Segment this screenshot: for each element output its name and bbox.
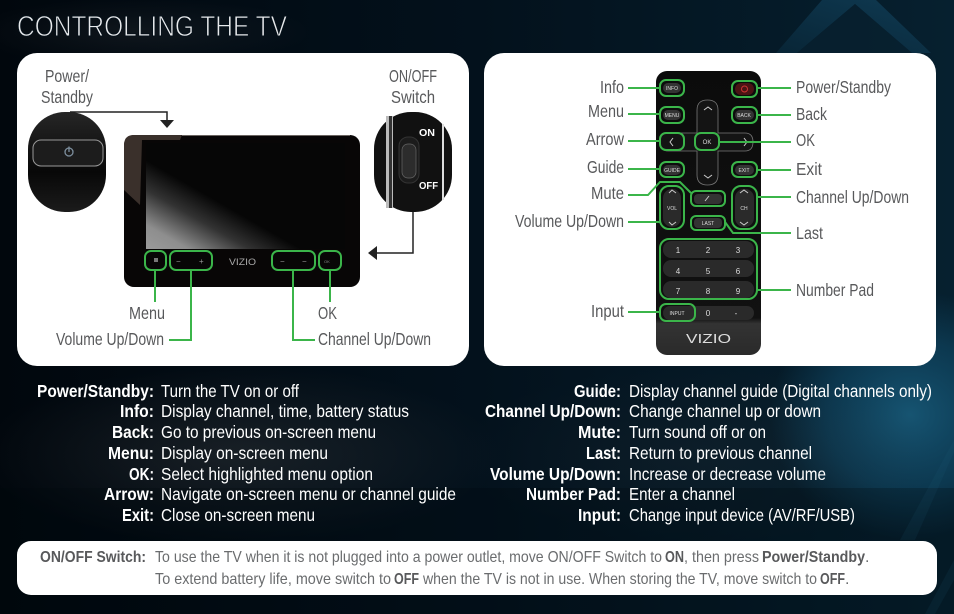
title: CONTROLLING THE TV: [17, 11, 288, 43]
text block: channel and input functions: Turn sound off or on: [629, 422, 766, 442]
remote body: 8: [706, 287, 711, 296]
label: ON/OFF Switch: [389, 66, 437, 107]
panel: ON/OFF switch note: OFF: [820, 571, 845, 588]
remote body: MENU: [665, 113, 680, 119]
labels: remote right: Back: [796, 104, 827, 124]
text block: TV and power functions: Display channel, time, battery status: [161, 401, 409, 421]
remote body: 9: [736, 287, 741, 296]
labels: TV buttons: Channel Up/Down: [318, 329, 431, 349]
text block: TV and power functions: Go to previous on-screen menu: [161, 422, 376, 442]
remote body: 3: [736, 246, 741, 255]
TV device: −: [302, 257, 307, 266]
panel: ON/OFF switch note: To extend battery life, move switch to: [155, 571, 391, 588]
remote body: 7: [676, 287, 681, 296]
icon: on/off switch close-up: ON: [419, 128, 435, 139]
TV device: +: [199, 257, 204, 266]
panel: remote control: [484, 53, 936, 366]
labels: remote left: Menu: [588, 101, 624, 121]
text block: channel and input functions: Change input device (AV/RF/USB): [629, 505, 855, 525]
arrow: power button to TV: [70, 112, 174, 128]
labels: remote left: Volume Up/Down: [515, 211, 624, 231]
text block: TV and power functions: Info:: [120, 401, 154, 421]
callouts: TV buttons: [145, 251, 341, 340]
remote body: VIZIO: [686, 331, 731, 346]
text block: channel and input functions: Number Pad:: [526, 484, 621, 504]
text block: channel and input functions: Volume Up/Down:: [490, 464, 621, 484]
remote body: 6: [736, 267, 741, 276]
labels: remote right: Channel Up/Down: [796, 187, 909, 207]
text block: TV and power functions: Arrow:: [104, 484, 154, 504]
labels: TV buttons: [56, 303, 431, 349]
remote body: 2: [706, 246, 711, 255]
panel: ON/OFF switch note: ON/OFF Switch:: [40, 549, 146, 566]
labels: remote right: Last: [796, 223, 823, 243]
text block: channel and input functions: Guide:: [574, 381, 621, 401]
labels: remote left: Info: [600, 77, 624, 97]
callouts: remote buttons: [628, 80, 791, 321]
arrow: switch to TV: [368, 212, 413, 260]
text block: TV and power functions: Navigate on-screen menu or channel guide: [161, 484, 456, 504]
remote body: -: [735, 309, 738, 318]
text block: TV and power functions: Turn the TV on or off: [161, 381, 299, 401]
text block: TV and power functions: Menu:: [108, 443, 154, 463]
labels: TV buttons: Menu: [129, 303, 165, 323]
label: Power/Standby: Standby: [41, 87, 93, 107]
panel: ON/OFF switch note: To use the TV when it is not plugged into a power outlet, move ON/OFF Switch to: [155, 549, 662, 566]
remote body: 4: [676, 267, 681, 276]
remote body: OK: [703, 140, 711, 146]
remote body: GUIDE: [664, 168, 681, 174]
text block: TV and power functions: Select highlighted menu option: [161, 464, 373, 484]
panel: ON/OFF switch note: , then press: [684, 549, 759, 566]
text block: channel and input functions: Return to previous channel: [629, 443, 812, 463]
icon: power button close-up: [28, 112, 106, 212]
panel: ON/OFF switch note: Power/Standby: [762, 549, 865, 566]
remote body: EXIT: [738, 168, 750, 174]
labels: remote left: Input: [591, 301, 624, 321]
text block: channel and input functions: Channel Up/Down:: [485, 401, 621, 421]
text block: TV and power functions: [37, 381, 456, 525]
text block: channel and input functions: Mute:: [578, 422, 621, 442]
remote body: LAST: [702, 221, 714, 227]
panel: ON/OFF switch note: ON: [665, 549, 684, 566]
panel: ON/OFF switch note: OFF: [394, 571, 419, 588]
text block: TV and power functions: OK:: [129, 464, 154, 484]
label: ON/OFF Switch: Switch: [391, 87, 435, 107]
remote body: BACK: [737, 113, 751, 119]
panel: ON/OFF switch note: .: [865, 549, 869, 566]
panel: ON/OFF switch note: .: [845, 571, 849, 588]
remote body: INPUT: [670, 311, 684, 317]
remote body: CH: [740, 206, 748, 212]
remote body: INFO: [666, 86, 678, 92]
label: Power/Standby: Power/: [45, 66, 89, 86]
text block: TV and power functions: Close on-screen menu: [161, 505, 315, 525]
TV device: −: [176, 257, 181, 266]
labels: remote right: Number Pad: [796, 280, 874, 300]
TV device: −: [280, 257, 285, 266]
labels: remote left: Mute: [591, 183, 624, 203]
text block: TV and power functions: Exit:: [122, 505, 154, 525]
labels: TV buttons: OK: [318, 303, 337, 323]
remote body: 5: [706, 267, 711, 276]
labels: remote right: OK: [796, 130, 815, 150]
labels: remote left: Arrow: [586, 129, 624, 149]
TV device: [124, 135, 360, 287]
remote body: 1: [676, 246, 681, 255]
remote body: [656, 71, 761, 355]
labels: remote left: [515, 77, 624, 321]
text block: TV and power functions: Display on-screen menu: [161, 443, 328, 463]
labels: remote left: Guide: [587, 157, 624, 177]
text block: channel and input functions: Increase or decrease volume: [629, 464, 826, 484]
text block: TV and power functions: Power/Standby:: [37, 381, 154, 401]
TV device: VIZIO: [229, 257, 256, 267]
labels: remote right: [796, 77, 909, 300]
remote body: 0: [706, 309, 711, 318]
panel: ON/OFF switch note: [17, 541, 937, 595]
text block: channel and input functions: [485, 381, 932, 525]
labels: TV buttons: Volume Up/Down: [56, 329, 164, 349]
text block: TV and power functions: Back:: [112, 422, 154, 442]
panel: ON/OFF switch note: when the TV is not in use. When storing the TV, move switch to: [422, 571, 817, 588]
text block: channel and input functions: Enter a channel: [629, 484, 735, 504]
icon: on/off switch close-up: [374, 112, 452, 212]
TV device: OK: [324, 259, 330, 264]
labels: remote right: Exit: [796, 159, 822, 179]
label: Power/Standby: [41, 66, 93, 107]
text block: channel and input functions: Change channel up or down: [629, 401, 821, 421]
labels: remote right: Power/Standby: [796, 77, 891, 97]
text block: channel and input functions: Input:: [578, 505, 621, 525]
panel: TV controls: [17, 53, 469, 366]
remote body: VOL: [667, 206, 677, 212]
text block: channel and input functions: Last:: [586, 443, 621, 463]
label: ON/OFF Switch: ON/OFF: [389, 66, 437, 86]
icon: on/off switch close-up: OFF: [419, 181, 438, 192]
